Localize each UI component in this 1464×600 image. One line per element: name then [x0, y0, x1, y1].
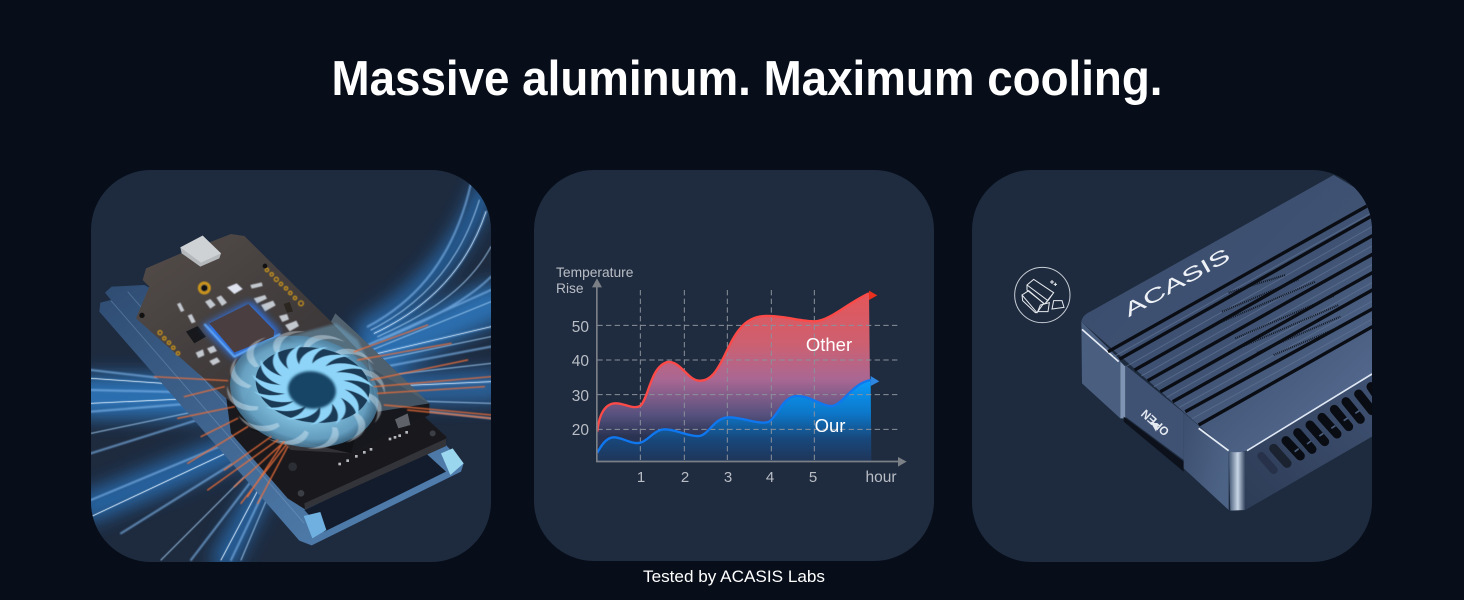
side face — [1244, 373, 1372, 510]
panel: temperature rise chart: 1 — [637, 469, 645, 486]
tray — [99, 285, 464, 545]
panel: temperature rise chart: 3 — [724, 469, 732, 486]
area: our — [597, 380, 871, 462]
icon: metal ingots — [1015, 267, 1070, 323]
open arrow — [1150, 422, 1159, 432]
panel: temperature rise chart: 20 — [572, 422, 589, 439]
cooling fins — [1108, 206, 1375, 425]
side vents — [1261, 387, 1379, 470]
orange heat streams — [154, 325, 491, 503]
axes — [592, 278, 907, 467]
lower front — [1184, 413, 1229, 510]
black base plate — [226, 398, 446, 510]
air streams — [91, 183, 491, 560]
usb connector — [180, 236, 221, 267]
chart — [592, 278, 907, 467]
panel: temperature rise chart: 5 — [809, 469, 817, 486]
line: other — [597, 293, 869, 432]
chart labels: Temperature — [556, 265, 634, 280]
series label: other: Other — [806, 334, 852, 355]
logo text: ACASIS — [1121, 245, 1234, 322]
panel: temperature rise chart — [534, 170, 934, 561]
slot below door — [1124, 417, 1184, 472]
pcb board — [136, 234, 429, 453]
panel: temperature rise chart: 30 — [572, 388, 589, 405]
panel: temperature rise chart: hour — [865, 469, 897, 486]
vent notches — [1295, 411, 1359, 452]
rounded corner — [1229, 452, 1245, 511]
top face — [1081, 175, 1375, 452]
series label: our: Our — [815, 415, 845, 436]
arrowhead: other — [869, 291, 877, 300]
enclosure — [1081, 175, 1379, 511]
mesh vents — [1222, 275, 1340, 355]
title: Massive aluminum. Maximum cooling. — [332, 52, 1162, 106]
panel: temperature rise chart: 40 — [572, 353, 589, 370]
chart labels — [556, 265, 634, 296]
panel: temperature rise chart: 2 — [681, 469, 689, 486]
panel: temperature rise chart: 4 — [766, 469, 774, 486]
panel: aluminum enclosure — [972, 170, 1379, 562]
gold pads — [158, 268, 303, 355]
panel: fan cooling illustration — [91, 170, 491, 562]
door — [1125, 365, 1184, 460]
area: other — [597, 293, 871, 447]
grid — [597, 290, 898, 462]
panel: temperature rise chart: 50 — [572, 319, 589, 336]
caption: Tested by ACASIS Labs — [643, 567, 825, 586]
base plate pins — [338, 431, 408, 465]
components — [177, 282, 299, 365]
line: our — [597, 380, 871, 453]
fan — [226, 314, 430, 454]
chip with glow — [203, 302, 281, 358]
front face — [1081, 322, 1120, 418]
chart labels: Rise — [556, 281, 584, 296]
top face highlights — [1082, 329, 1229, 451]
open label: OPEN — [1138, 407, 1172, 439]
arrowhead: our — [871, 376, 879, 386]
